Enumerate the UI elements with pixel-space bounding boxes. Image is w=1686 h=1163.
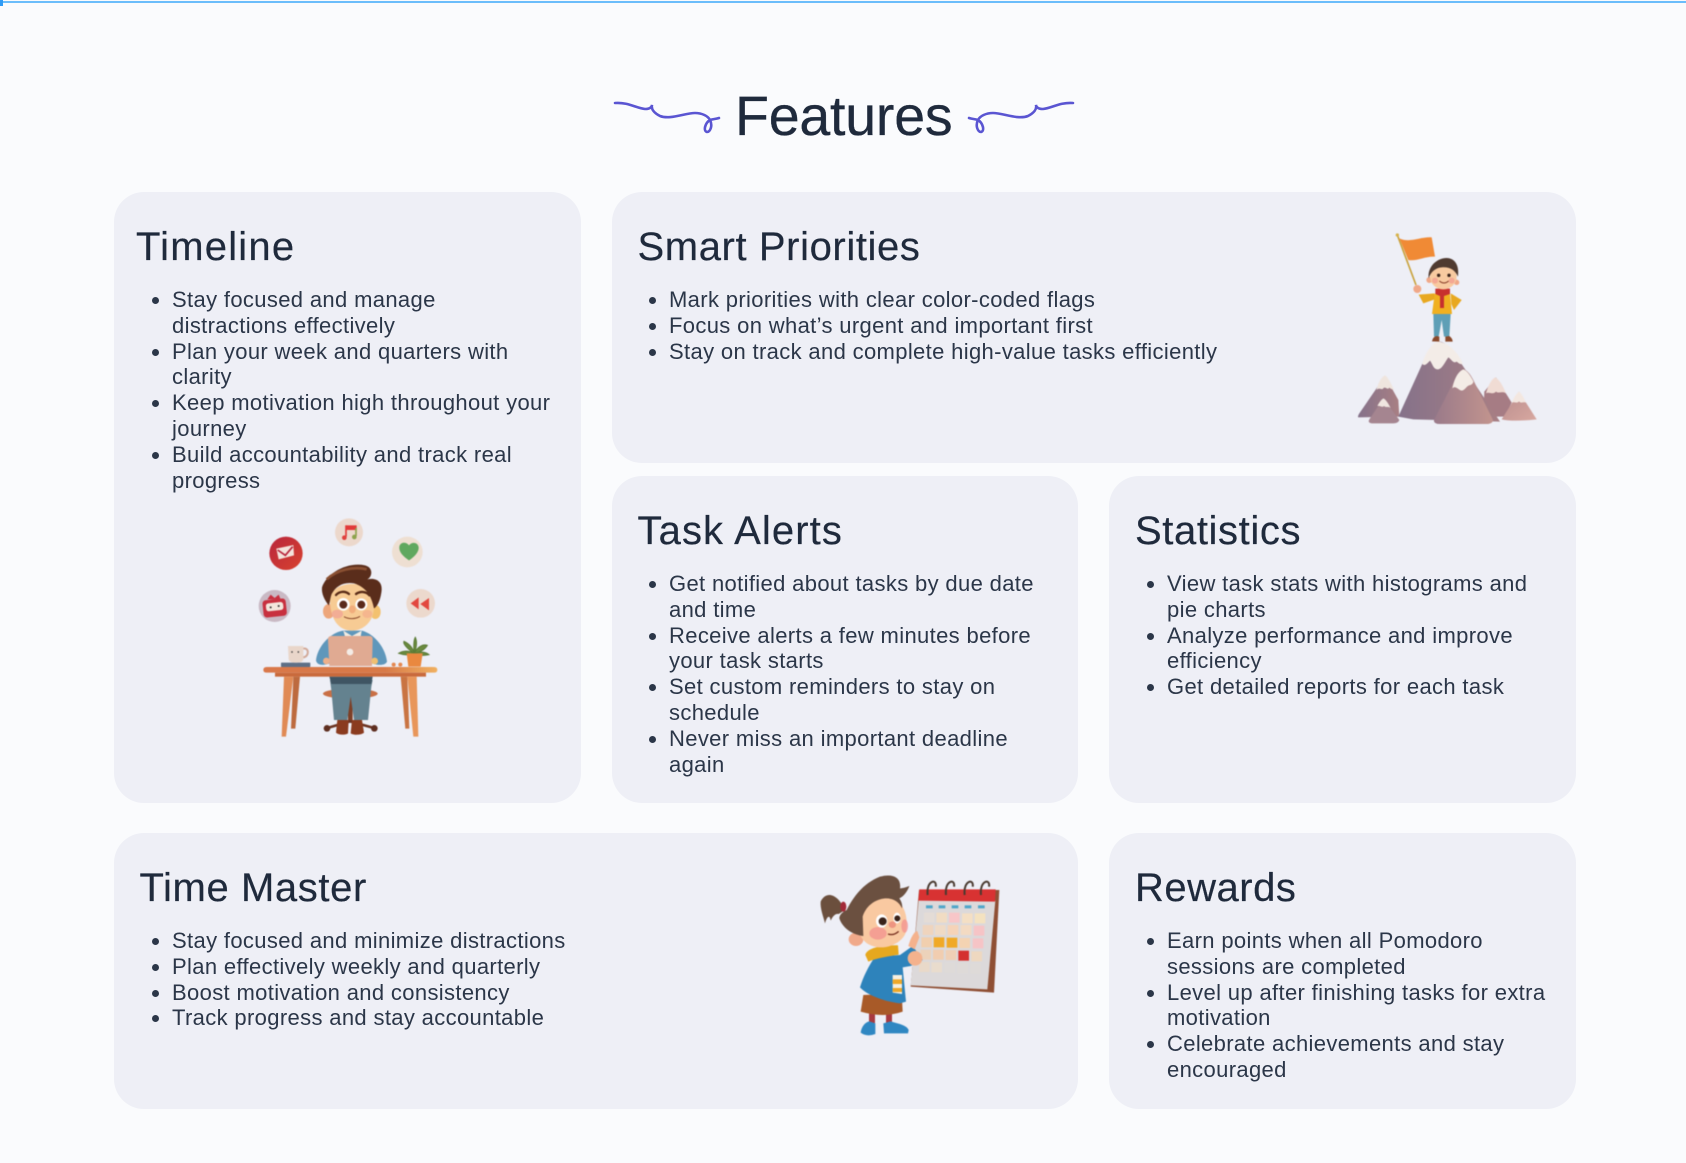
child figure [1413,258,1462,342]
list: Time Master bullets: Boost motivation and consistency [172,980,510,1005]
list: Task Alerts bullets: Never miss an important deadline [669,726,1008,751]
list: Timeline bullets: Stay focused and manage [172,287,436,312]
list: Timeline bullets: Keep motivation high throughout your [172,390,550,415]
list: Task Alerts bullets: again [669,752,725,777]
hair and ponytail [839,875,909,936]
legs [330,680,373,720]
illustration: child holding calendar [820,874,1000,1036]
list: Smart Priorities bullets: Mark priorities with clear color-coded flags [669,287,1095,312]
list: Rewards bullets: encouraged [1167,1057,1287,1082]
jacket body [316,631,387,665]
mug on books [281,646,310,667]
potted plant [392,637,429,667]
shorts [861,993,903,1015]
list: Statistics bullets: efficiency [1167,648,1262,673]
list: Rewards bullets: Celebrate achievements and stay [1167,1031,1504,1056]
list: Time Master bullets: Track progress and stay accountable [172,1005,544,1030]
panel: Time Master [114,833,1078,1109]
list: Smart Priorities bullets: Focus on what’s urgent and important first [669,313,1093,338]
list: Timeline bullets: clarity [172,364,232,389]
panel: Statistics [1109,476,1576,803]
heading: Task Alerts: Task Alerts [638,509,843,553]
top-left corner mark [0,0,3,6]
left title flourish [614,102,720,134]
list: Timeline bullets [152,287,550,493]
list: Rewards bullets: Earn points when all Pomodoro [1167,928,1483,953]
panel: Rewards [1109,833,1576,1109]
mountain range [1358,342,1537,424]
neck and head [323,604,334,619]
list: Rewards bullets: sessions are completed [1167,954,1406,979]
icon: mail [269,537,303,570]
list: Rewards bullets [1147,928,1546,1082]
list: Task Alerts bullets: your task starts [669,648,824,673]
list: Time Master bullets [152,928,566,1030]
illustration: person at desk with floating app icons [258,518,438,738]
eyes [337,598,350,611]
head [849,933,863,946]
title: Features [735,85,952,147]
panel: Timeline [114,192,581,803]
calendar [911,882,999,993]
list: Timeline bullets: Build accountability and track real [172,442,512,467]
scarf [865,945,899,962]
heading: Timeline: Timeline [136,225,295,269]
icon: heart [392,537,423,567]
list: Time Master bullets: Stay focused and minimize distractions [172,928,566,953]
list: Statistics bullets [1147,571,1527,699]
jacket [860,946,923,1003]
heading: Time Master: Time Master [140,866,367,910]
list: Timeline bullets: journey [172,416,247,441]
illustration: child with flag on mountain peak [1358,232,1537,425]
flag and pole [1396,233,1435,285]
list: Task Alerts bullets: Receive alerts a few minutes before [669,623,1031,648]
list: Task Alerts bullets: Get notified about tasks by due date [669,571,1034,596]
list: Smart Priorities bullets: Stay on track and complete high-value tasks efficiently [669,339,1217,364]
right title flourish [968,102,1074,134]
desk [263,667,437,737]
list: Task Alerts bullets [649,571,1034,777]
heading: Smart Priorities: Smart Priorities [638,225,920,269]
panel: Smart Priorities [612,192,1576,463]
list: Statistics bullets: Analyze performance and improve [1167,623,1513,648]
list: Timeline bullets: distractions effectively [172,313,395,338]
list: Statistics bullets: pie charts [1167,597,1266,622]
stool and chair base [323,689,378,699]
list: Task Alerts bullets: Set custom reminders to stay on [669,674,995,699]
child figure [821,875,923,1035]
list: Statistics bullets: Get detailed reports for each task [1167,674,1504,699]
laptop [328,636,373,666]
list: Time Master bullets: Plan effectively weekly and quarterly [172,954,540,979]
person [316,565,387,735]
list: Task Alerts bullets: schedule [669,700,760,725]
top edge line [0,1,1686,3]
hair [322,565,382,608]
heading: Statistics: Statistics [1135,509,1301,553]
list: Timeline bullets: Plan your week and quarters with [172,339,508,364]
list: Rewards bullets: Level up after finishing tasks for extra [1167,980,1545,1005]
shirt [893,975,902,994]
icon: robot face [259,590,291,622]
list: Statistics bullets: View task stats with histograms and [1167,571,1527,596]
heading: Rewards: Rewards [1135,866,1296,910]
list: Task Alerts bullets: and time [669,597,756,622]
icon: music note [335,518,363,546]
panel: Task Alerts [612,476,1078,803]
legs and shoes [869,1012,875,1023]
list: Rewards bullets: motivation [1167,1005,1271,1030]
list: Smart Priorities bullets [649,287,1217,364]
icon: rewind [406,589,435,618]
list: Timeline bullets: progress [172,468,260,493]
